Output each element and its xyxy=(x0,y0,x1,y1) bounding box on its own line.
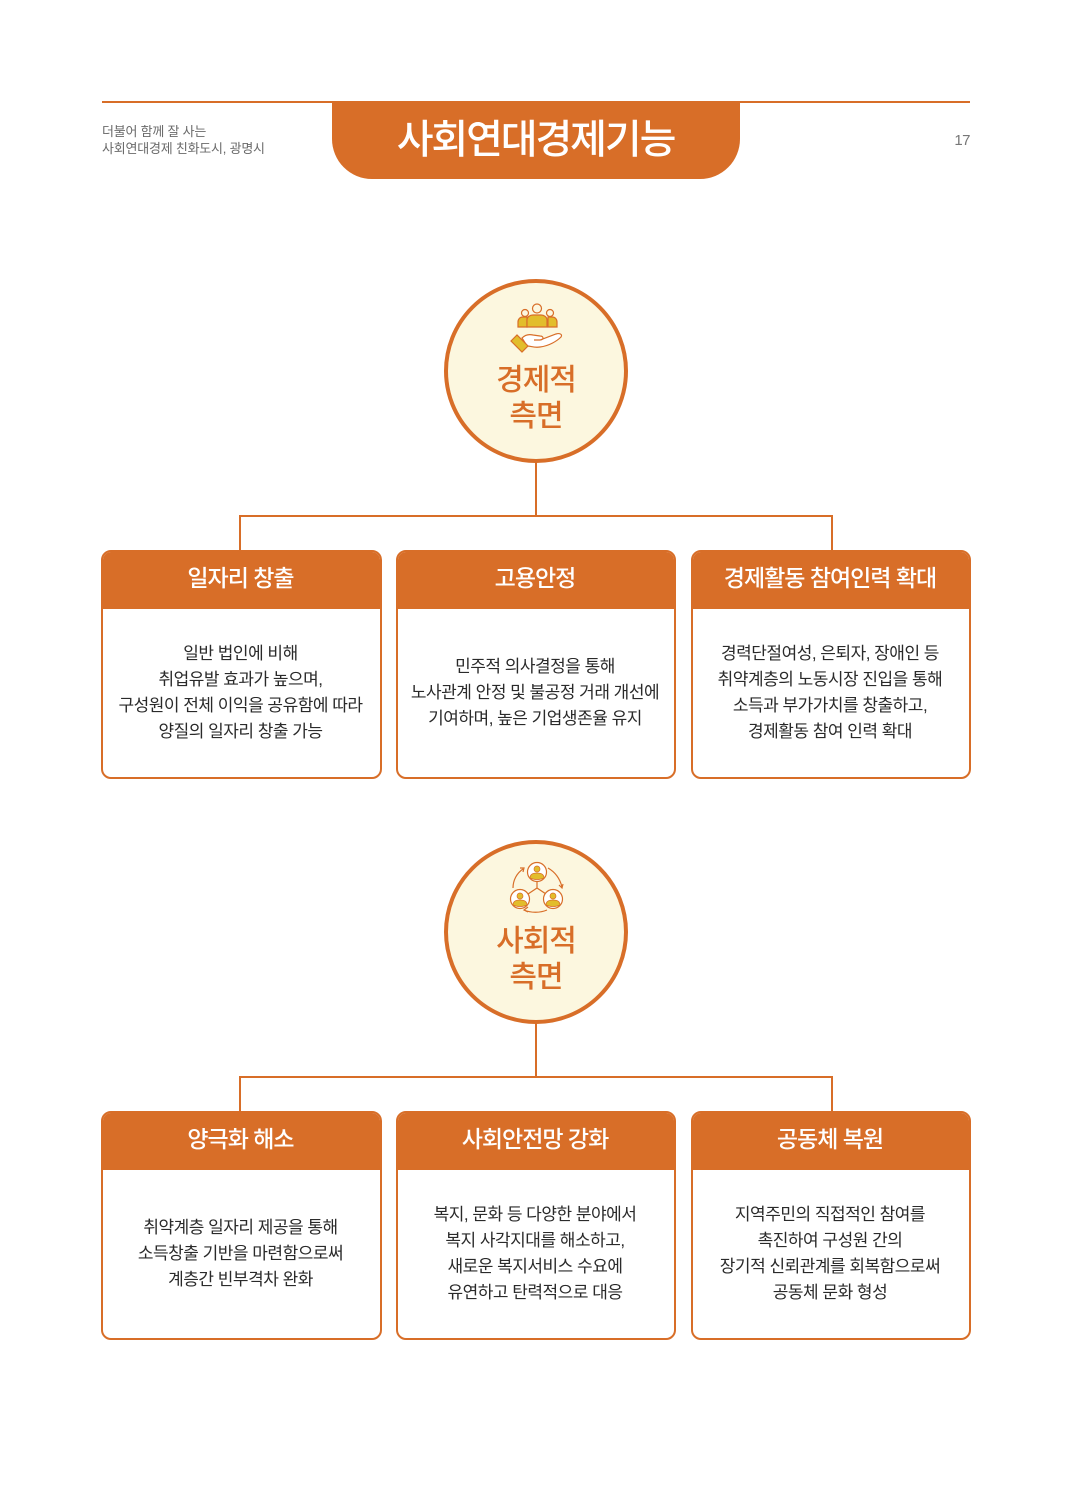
page number: 17 xyxy=(954,132,970,149)
panel: social circle xyxy=(444,840,628,1024)
card text xyxy=(138,1218,343,1288)
card text: 양질의 일자리 창출 가능 xyxy=(158,722,323,740)
card text xyxy=(434,1204,636,1302)
icon: connected people xyxy=(510,862,564,913)
card: reducing polarization xyxy=(101,1111,382,1340)
card text: 경력단절여성, 은퇴자, 장애인 등 xyxy=(721,644,939,662)
card: workforce participation xyxy=(691,550,971,779)
connector: economic xyxy=(239,462,833,550)
card text: 계층간 빈부격차 완화 xyxy=(168,1270,313,1288)
label: economic aspect: 측면 xyxy=(509,400,563,433)
card heading xyxy=(690,550,970,609)
header subtitle: 더불어 함께 잘 사는 xyxy=(102,124,206,139)
card text: 복지 사각지대를 해소하고, xyxy=(445,1230,625,1250)
card text: 취업유발 효과가 높으며, xyxy=(158,670,323,688)
header subtitle: 사회연대경제 친화도시, 광명시 xyxy=(102,141,265,156)
card text: 소득과 부가가치를 창출하고, xyxy=(733,696,927,714)
label: economic aspect: 경제적 xyxy=(496,364,576,397)
title xyxy=(332,101,740,179)
card text: 구성원이 전체 이익을 공유함에 따라 xyxy=(118,696,362,714)
card heading: 일자리 창출 xyxy=(187,565,294,591)
card text xyxy=(718,644,942,740)
card heading xyxy=(395,1111,675,1170)
card text: 지역주민의 직접적인 참여를 xyxy=(735,1204,925,1224)
card heading xyxy=(690,1111,970,1170)
label: economic aspect xyxy=(496,364,576,433)
card text: 촉진하여 구성원 간의 xyxy=(758,1230,902,1250)
title: 사회연대경제기능 xyxy=(397,118,674,162)
card text: 소득창출 기반을 마련함으로써 xyxy=(138,1244,343,1262)
card: community restoration xyxy=(691,1111,971,1340)
card heading xyxy=(100,1111,381,1170)
card text: 취약계층의 노동시장 진입을 통해 xyxy=(718,670,942,688)
card text: 기여하며, 높은 기업생존율 유지 xyxy=(428,708,642,728)
header rule xyxy=(102,101,970,103)
panel: economic circle xyxy=(444,279,628,463)
card: job creation xyxy=(101,550,382,779)
card heading xyxy=(395,550,675,609)
card text: 복지, 문화 등 다양한 분야에서 xyxy=(434,1204,636,1224)
card text: 경제활동 참여 인력 확대 xyxy=(748,722,912,740)
card text xyxy=(411,656,659,728)
label: social aspect: 사회적 xyxy=(496,925,576,958)
card text xyxy=(118,644,363,740)
card heading: 양극화 해소 xyxy=(187,1126,294,1152)
card: social safety net xyxy=(396,1111,676,1340)
icon: people over hand xyxy=(510,303,562,353)
header subtitle xyxy=(102,124,265,156)
card text: 새로운 복지서비스 수요에 xyxy=(447,1256,622,1276)
card heading xyxy=(100,550,381,609)
card text: 유연하고 탄력적으로 대응 xyxy=(447,1282,622,1302)
card text: 취약계층 일자리 제공을 통해 xyxy=(143,1218,338,1236)
label: social aspect: 측면 xyxy=(509,961,563,994)
card: employment stability xyxy=(396,550,676,779)
card heading: 사회안전망 강화 xyxy=(462,1126,608,1152)
card text: 노사관계 안정 및 불공정 거래 개선에 xyxy=(411,682,659,702)
card text: 일반 법인에 비해 xyxy=(183,644,298,662)
card text: 민주적 의사결정을 통해 xyxy=(455,656,615,676)
card text xyxy=(720,1204,940,1302)
card heading: 경제활동 참여인력 확대 xyxy=(724,565,936,591)
card text: 공동체 문화 형성 xyxy=(773,1282,887,1302)
card heading: 공동체 복원 xyxy=(777,1126,883,1152)
connector: social xyxy=(239,1024,833,1111)
card heading: 고용안정 xyxy=(495,565,575,591)
label: social aspect xyxy=(496,925,576,994)
card text: 장기적 신뢰관계를 회복함으로써 xyxy=(720,1256,940,1276)
